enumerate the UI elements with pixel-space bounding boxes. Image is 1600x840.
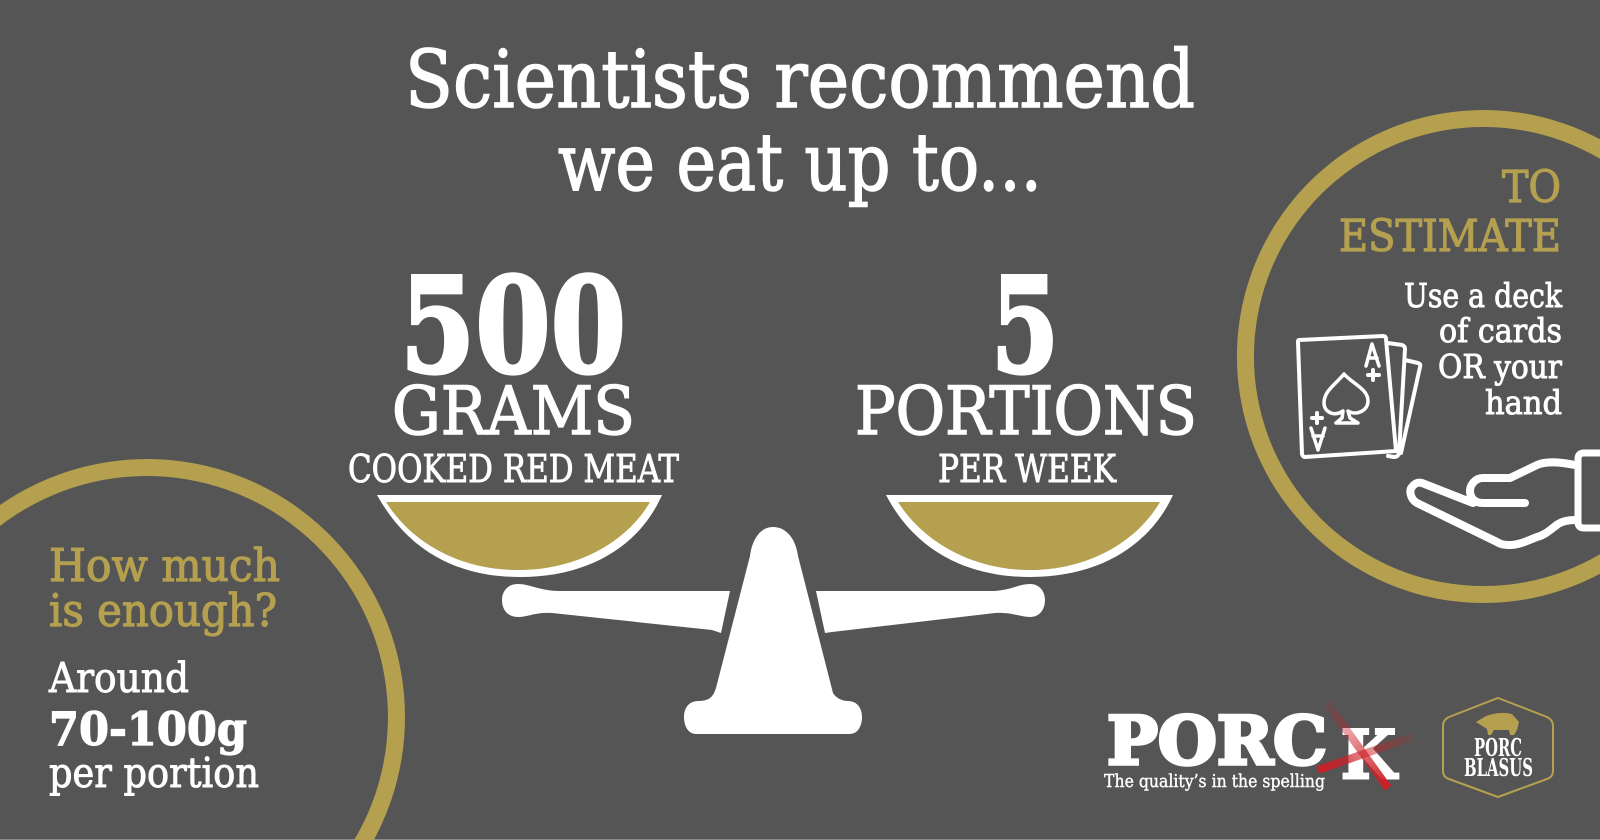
icon: playing cards [1298, 336, 1420, 457]
crossed-out K: K [1341, 716, 1399, 794]
text: to estimate: of cards [1439, 311, 1562, 350]
circle: to estimate [1237, 110, 1600, 603]
stat: 5 portions: 5 [991, 249, 1059, 404]
title [405, 33, 1195, 209]
logo: Porc Blasus badge [1443, 698, 1553, 797]
title: we eat up to... [558, 116, 1042, 209]
text: to estimate [1339, 162, 1563, 422]
logo: PORCK: PORC [1107, 702, 1327, 780]
text: how much is enough: How much [49, 539, 280, 592]
stat: 5 portions: PER WEEK [938, 447, 1116, 491]
logo: Porc Blasus badge: PORC [1474, 733, 1522, 762]
right beam [816, 584, 1045, 633]
circle: how much is enough [0, 459, 405, 840]
text: to estimate: hand [1485, 383, 1562, 422]
tagline: The quality’s in the spelling [1104, 771, 1325, 792]
text: to estimate: Use a deck [1404, 276, 1563, 315]
text: how much is enough [48, 539, 280, 797]
stat: 500 grams [348, 249, 679, 491]
text: how much is enough: 70-100g [49, 702, 247, 756]
red cross [1318, 703, 1412, 788]
balance scale [377, 495, 1173, 734]
icon: open hand [1410, 453, 1600, 545]
title: Scientists recommend [405, 33, 1195, 126]
stat: 5 portions [855, 249, 1197, 491]
stat: 500 grams: 500 [400, 249, 626, 404]
logo: PORCK [1104, 702, 1412, 794]
stat: 500 grams: COOKED RED MEAT [348, 447, 679, 491]
logo: Porc Blasus badge: BLASUS [1464, 753, 1533, 782]
text: to estimate: ESTIMATE [1339, 211, 1561, 262]
text: how much is enough: Around [48, 654, 189, 702]
text: how much is enough: is enough? [49, 584, 277, 637]
left bowl [377, 495, 662, 577]
text: to estimate: OR your [1438, 347, 1562, 386]
stat: 500 grams: GRAMS [392, 373, 635, 450]
icon: pig [1476, 713, 1519, 735]
text: how much is enough: per portion [49, 749, 259, 797]
central stand [684, 527, 862, 734]
text: to estimate: TO [1502, 162, 1561, 213]
left beam [502, 584, 730, 633]
stat: 5 portions: PORTIONS [855, 373, 1197, 450]
right bowl [886, 495, 1173, 577]
